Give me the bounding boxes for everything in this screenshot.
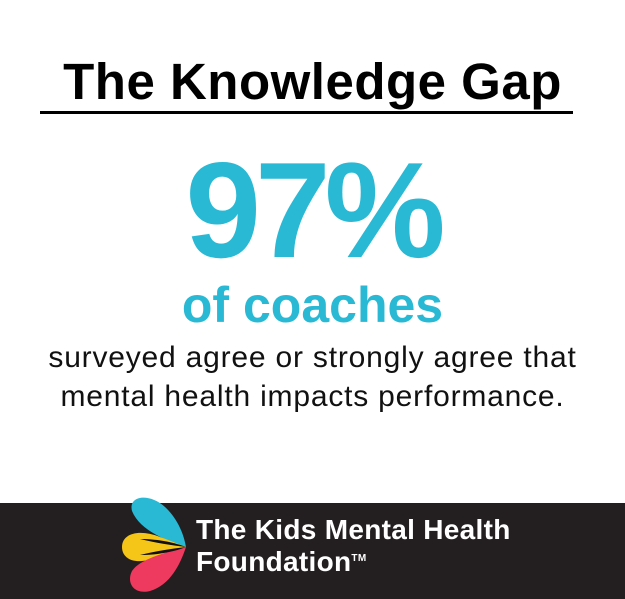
- body text: surveyed agree or strongly agree that: [48, 341, 577, 374]
- logo text: [196, 514, 511, 577]
- body text: [48, 341, 577, 413]
- subheading: of coaches: of coaches: [182, 277, 443, 333]
- logo icon: [122, 498, 186, 592]
- big stat 97%: 97%: [185, 134, 440, 286]
- footer band: [0, 503, 625, 599]
- body text: mental health impacts performance.: [60, 380, 565, 413]
- logo text: The Kids Mental Health: [196, 514, 511, 545]
- title underline: [40, 111, 573, 114]
- logo text: FoundationTM: [196, 546, 366, 577]
- title: The Knowledge Gap: [63, 53, 562, 110]
